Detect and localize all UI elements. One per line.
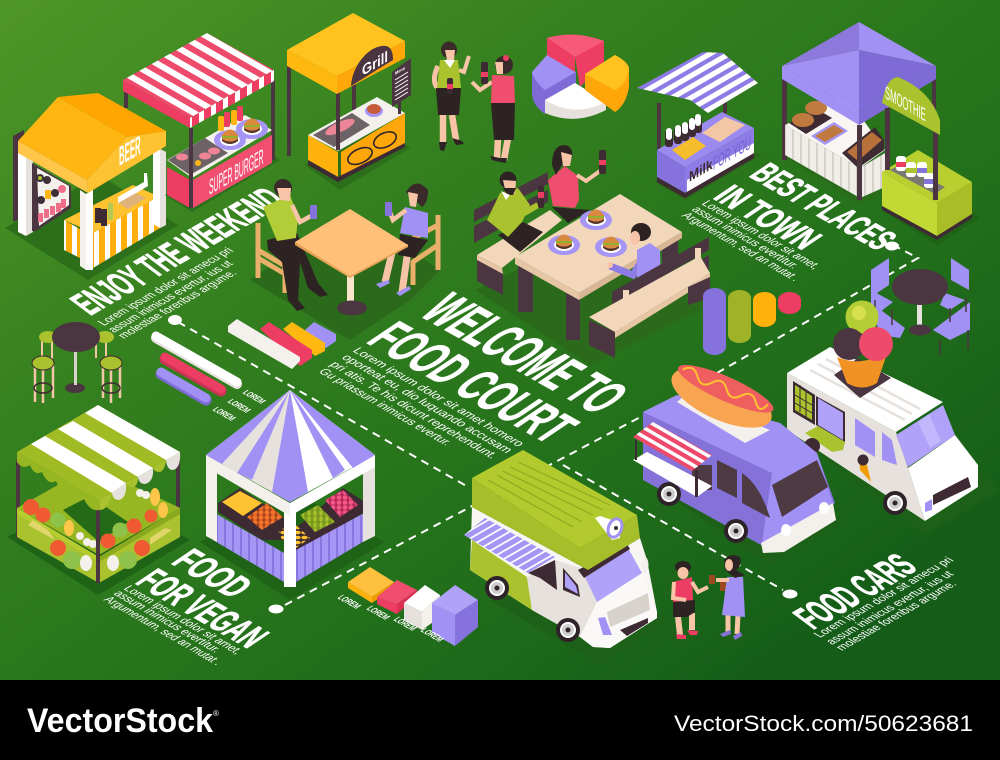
footer bar: VectorStock — [27, 702, 213, 740]
heading: welcome to food court: FOOD COURT — [354, 313, 591, 452]
footer bar: VectorStock.com/50623681 — [674, 711, 973, 736]
text: food for vegan: Argumentum, sed an mutat . — [100, 594, 226, 667]
stall: fruit tent — [200, 390, 385, 600]
table top — [515, 194, 682, 340]
hot dog truck — [633, 356, 845, 565]
stall: purple tent and smoothie — [782, 22, 980, 245]
fruit crates — [218, 488, 365, 550]
stall: milk: FOR YOU — [713, 132, 751, 174]
text block: best places — [678, 157, 906, 283]
heading: welcome to food court — [354, 284, 643, 452]
text: enjoy the weekend: Lorem ipsum dolor sit amecu pri — [94, 245, 236, 328]
people: customers with ice cream — [669, 555, 747, 642]
purple chairs and round table — [870, 258, 970, 355]
bar chart: small blocks — [228, 319, 336, 369]
label: grill: Grill — [362, 48, 388, 80]
woman in red — [548, 145, 606, 223]
text: welcome body: Lorem ipsum dolor sit amet homero — [349, 345, 528, 449]
stall: vegetables — [7, 405, 190, 595]
man in green shirt — [263, 179, 328, 311]
woman in lavender top — [376, 183, 428, 296]
heading: food for vegan — [127, 543, 277, 654]
stall: milk — [637, 52, 762, 200]
text: food cars: molestiae forenbus argume. — [832, 579, 960, 653]
text: enjoy the weekend: molestiae forenbus argume. — [114, 268, 240, 341]
block chart: LOREM — [391, 616, 419, 633]
burgers on plates — [548, 210, 627, 257]
heading: best places in town: IN TOWN — [705, 179, 831, 255]
heading: best places in town: BEST PLACES — [741, 157, 906, 255]
block chart: LOREM — [418, 627, 446, 644]
text: welcome body: Gu priassum inimicus evertur. — [315, 366, 456, 448]
table with seated couple — [250, 179, 440, 340]
footer bar: ® — [213, 709, 219, 718]
left bench — [474, 172, 562, 295]
heading: enjoy the weekend: ENJOY THE WEEKEND — [62, 181, 294, 321]
block chart — [335, 567, 478, 646]
heading: food for vegan: FOR VEGAN — [127, 563, 277, 654]
text: welcome body: oporteat eu, dio luquando accusam — [338, 352, 516, 455]
body text: assum inimicus evertitur. — [688, 204, 803, 271]
icon: hot dog — [663, 356, 780, 443]
green food van — [464, 450, 670, 665]
text: food cars: assum inimicus evertur, ius ut — [822, 569, 957, 647]
stool table set — [32, 322, 122, 403]
bar labels — [210, 389, 268, 423]
body text: Argumentum, sed an mutat . — [678, 210, 804, 283]
stall: grill — [287, 13, 411, 190]
man with beard — [487, 172, 544, 252]
block chart: LOREM — [364, 605, 392, 622]
bar labels: LOREM — [210, 406, 238, 423]
text: food cars: Lorem ipsum dolor sit amecu pri — [810, 555, 957, 640]
menu board: Menu — [395, 65, 405, 76]
cylinder chart — [703, 288, 801, 355]
pie chart — [532, 35, 629, 119]
body text: Lorem ipsum dolor sit amet, — [698, 198, 824, 271]
right bench — [589, 237, 710, 358]
stall: beer: BEER — [119, 129, 141, 172]
bar labels: LOREM — [225, 398, 253, 415]
menu board — [392, 58, 411, 114]
bar chart: rounded bars — [156, 336, 237, 400]
person in blue — [607, 223, 661, 290]
text: enjoy the weekend: assum inimicus evertur, ius ut — [104, 258, 236, 335]
heading: welcome to food court: WELCOME TO — [407, 284, 643, 422]
picnic table with people — [474, 145, 720, 365]
stall: super burger — [123, 33, 280, 212]
heading: best places in town — [705, 157, 906, 255]
text: food for vegan: assum inimicus evertitur. — [110, 588, 225, 655]
bar labels: LOREM — [240, 389, 268, 406]
footer bar — [0, 680, 1000, 760]
label: milk for you: Milk — [689, 155, 713, 185]
text: welcome body: pri atis. Te his dicunt reprehendunt. — [326, 359, 501, 461]
stall: purple tent and smoothie: SMOOTHIE — [885, 82, 926, 126]
awning stripes — [31, 405, 180, 493]
connector dots — [168, 242, 899, 614]
text: food for vegan: Lorem ipsum dolor sit amet, — [120, 583, 246, 656]
block chart: LOREM — [335, 594, 363, 611]
ice cream truck — [787, 300, 1000, 535]
icon: megaphone — [595, 515, 626, 541]
text: SUPER BURGER — [209, 143, 264, 200]
icon: ice cream — [833, 300, 893, 398]
heading: food for vegan: FOOD — [163, 543, 261, 604]
stall: beer — [5, 93, 178, 280]
people: two women with bottles — [434, 42, 515, 163]
dashed connector lines — [178, 245, 918, 605]
